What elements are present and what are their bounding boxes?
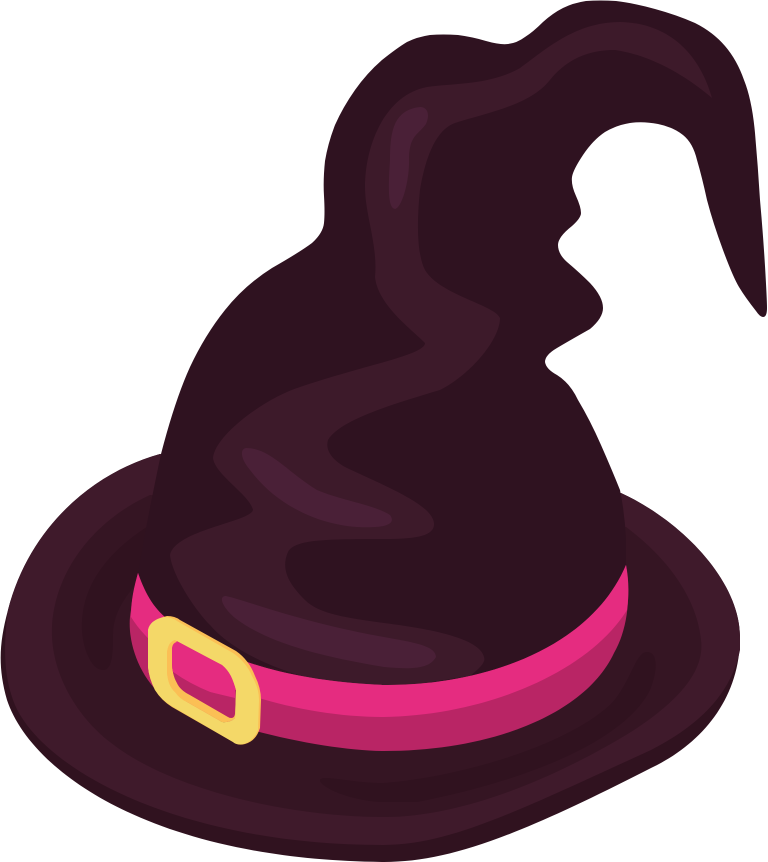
buckle face <box>148 617 259 744</box>
brim top surface <box>5 454 740 845</box>
brim underside <box>1 454 740 862</box>
swirl highlight <box>170 22 712 690</box>
buckle edge <box>148 616 261 745</box>
brim <box>1 454 740 862</box>
buckle inner shade <box>167 640 235 722</box>
highlight: lower <box>222 596 436 668</box>
brim shadow left <box>82 525 150 670</box>
brim shadow right <box>320 652 656 802</box>
cone silhouette <box>138 0 767 695</box>
highlight: middle <box>242 448 392 527</box>
brim inner ring <box>52 495 701 817</box>
buckle opening: pink band <box>172 642 235 700</box>
buckle <box>148 616 261 745</box>
band shadow <box>130 565 628 751</box>
hat cone <box>138 0 767 695</box>
buckle opening: band shadow <box>173 672 235 718</box>
band top <box>131 565 628 717</box>
hat band <box>130 565 628 751</box>
highlight: upper <box>389 107 428 209</box>
